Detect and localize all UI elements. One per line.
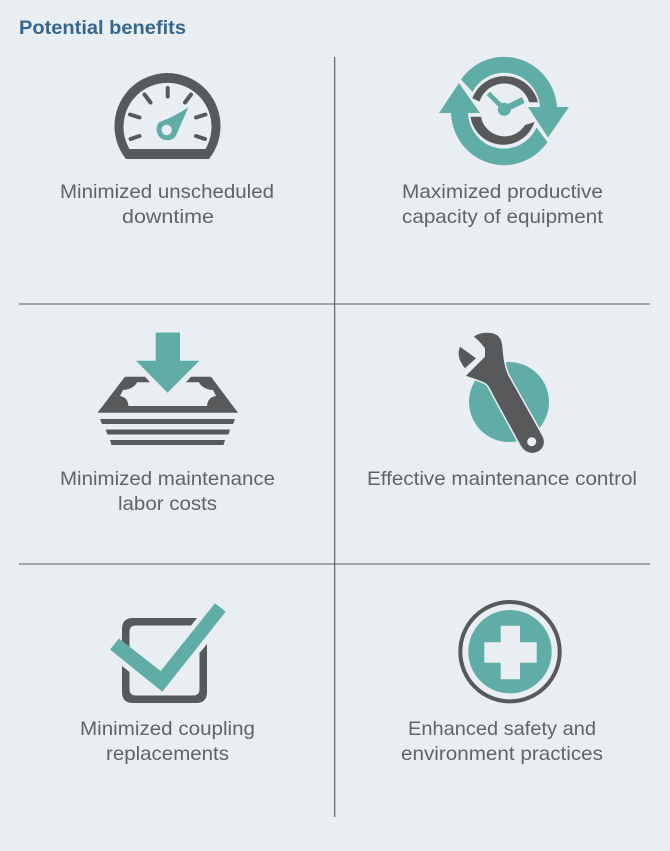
label [80,718,255,765]
panel: minimized coupling replacements [80,603,255,765]
icon: clock with cycle arrows [439,57,569,165]
label: Minimized maintenance [60,468,275,490]
label: environment practices [401,743,603,765]
title: Potential benefits [19,18,186,39]
label: Effective maintenance control [367,468,637,490]
label: Minimized coupling [80,718,255,740]
panel: enhanced safety and environment practices [401,602,603,765]
label: replacements [106,743,229,765]
icon: checked box [110,603,226,703]
label: Minimized unscheduled [60,181,274,203]
label [402,181,604,228]
label: Maximized productive [402,181,603,203]
label [60,181,274,228]
panel: maximized productive capacity [402,57,604,228]
label: Enhanced safety and [408,718,596,740]
panel: minimized unscheduled downtime [60,73,274,228]
label [60,468,275,515]
icon: stack of money with down arrow [98,332,238,445]
label [401,718,603,765]
icon: medical cross [460,602,560,701]
label: downtime [122,206,214,228]
label: capacity of equipment [402,206,604,228]
icon: speedometer gauge [115,73,220,159]
label: labor costs [118,493,217,515]
panel: effective maintenance control [367,333,637,490]
icon: wrench over teal circle [459,333,549,453]
panel: minimized maintenance labor costs [60,332,275,515]
